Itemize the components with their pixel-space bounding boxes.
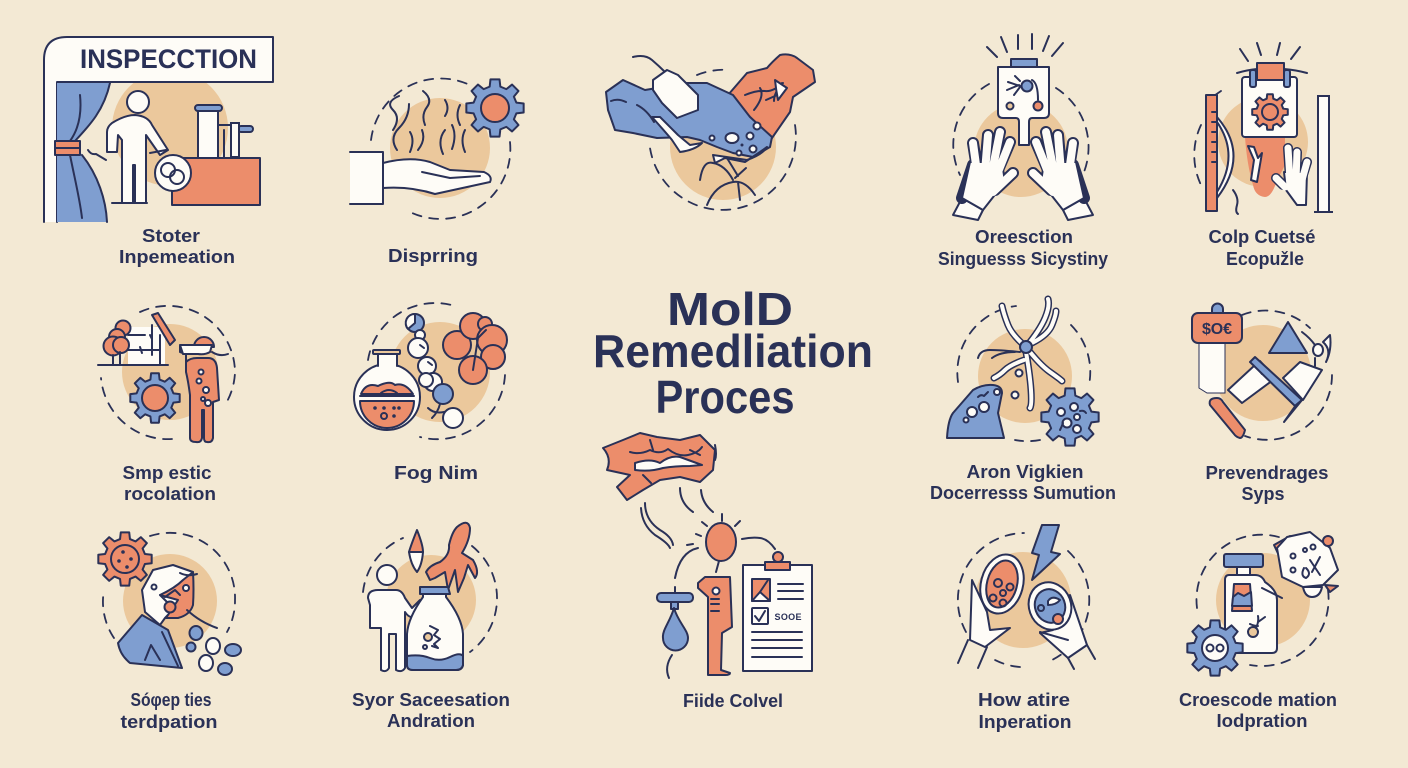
panel: person with jar: [363, 523, 497, 671]
caption: Oreesction: [975, 227, 1073, 247]
caption: Singuesss Sicystiny: [938, 249, 1108, 269]
icon: flask: [354, 350, 420, 430]
title: [593, 283, 873, 423]
icon: orange mold: [728, 54, 815, 138]
panel: mold with spores and tools: [603, 433, 812, 678]
icon: mycelium: [978, 299, 1062, 408]
icon: rays: [987, 34, 1063, 57]
heading label: inspection: INSPECCTION: [80, 44, 257, 74]
icon: spore gear: [98, 532, 152, 586]
title: Remedliation: [593, 325, 873, 377]
icon: clipboard checklist: [743, 552, 812, 671]
icon: coughed particles: [186, 626, 241, 675]
title: Proces: [656, 371, 794, 423]
caption: Fog Nim: [394, 463, 478, 483]
panel: mold blobs: [606, 54, 815, 210]
icon: molecules: [406, 313, 507, 428]
icon: bar: [1314, 96, 1333, 212]
caption: Syor Saceesation: [352, 690, 510, 710]
icon: leaf: [1302, 332, 1330, 366]
icon: open hand: [350, 152, 491, 204]
icon: hammer handle: [1210, 398, 1245, 438]
icon: lightning: [1032, 525, 1060, 580]
icon: spore trails: [641, 488, 713, 548]
caption: Inpemeation: [119, 247, 235, 267]
icon: gear: [1041, 388, 1099, 446]
icon: poster: [998, 59, 1049, 145]
caption: Colp Cuetsé: [1208, 227, 1316, 247]
icon: dropper: [657, 587, 693, 678]
panel: coughing man: [98, 532, 241, 675]
icon: orange stain: [1245, 137, 1285, 197]
caption: terdpation: [120, 712, 218, 732]
icon: price sign: $O€: [1202, 321, 1232, 338]
panel: spray bottle and gear: [1187, 532, 1338, 676]
caption: Docerresss Sumution: [930, 483, 1116, 503]
panel: cost tag and tools: [1192, 304, 1332, 440]
caption: Ecopužle: [1226, 249, 1304, 269]
icon: curtain: [55, 83, 110, 222]
caption: Stoter: [142, 226, 200, 246]
caption: Sóφep ties: [130, 690, 212, 710]
icon: droplet: [409, 530, 423, 572]
icon: orange bulb: [675, 514, 775, 578]
icon: orange mold mass: [603, 433, 716, 500]
icon: left hand: [953, 132, 1013, 220]
caption: How atire: [978, 690, 1070, 710]
icon: clipboard: [1242, 63, 1297, 137]
caption: Fiide Colvel: [683, 691, 783, 711]
caption: Smp estic: [122, 463, 212, 483]
caption: Syps: [1242, 484, 1284, 504]
icon: spore strands: [390, 91, 465, 154]
title: MolD: [667, 283, 793, 335]
icon: gear with eyes: [1187, 620, 1243, 676]
icon: blue mold: [606, 80, 772, 157]
panel: hands with poster: [953, 34, 1093, 220]
icon: worker: [152, 313, 228, 442]
panel: ruler and clipboard: [1194, 43, 1333, 214]
icon: toolbox: [172, 105, 260, 205]
caption: Inperation: [978, 712, 1072, 732]
icon: gear: [130, 373, 180, 423]
icon: magnified mold: [1274, 532, 1338, 597]
icon: blue mold: [947, 385, 1004, 438]
icon: man: [118, 565, 217, 668]
icon: orange tool: [698, 577, 732, 675]
icon: clipboard checklist: SOOE: [774, 612, 802, 622]
icon: person: [368, 565, 423, 671]
panel: inspection: [44, 37, 273, 222]
icon: left specimen: [958, 550, 1030, 668]
caption: Iodpration: [1216, 711, 1308, 731]
icon: squid mold: [426, 523, 477, 592]
icon: jar: [407, 587, 463, 670]
panel: hand with spores: [350, 79, 524, 219]
icon: blue triangle: [1269, 322, 1307, 353]
panel: neural mold and gear: [947, 299, 1099, 446]
heading label: inspection: [44, 37, 273, 222]
caption: Prevendrages: [1206, 463, 1328, 483]
icon: inspector: [88, 91, 168, 203]
panel: petri hands and lightning: [958, 525, 1095, 669]
icon: rays: [1237, 43, 1307, 73]
icon: right hand: [1033, 132, 1093, 220]
icon: trees and wall: [98, 320, 168, 365]
caption: rocolation: [124, 484, 216, 504]
icon: tools: [1228, 357, 1322, 422]
panel: worker with gear: [98, 306, 235, 442]
icon: magnifier: [155, 155, 191, 191]
icon: bottle: [1224, 554, 1282, 653]
caption: Croescode mation: [1179, 690, 1337, 710]
caption: Disprring: [388, 246, 478, 266]
caption: Aron Vigkien: [966, 462, 1084, 482]
panel: flask and molecules: [354, 303, 507, 439]
caption: Andration: [387, 711, 475, 731]
icon: ruler: [1206, 95, 1238, 214]
icon: small tool: [1248, 146, 1262, 182]
icon: right specimen: [1022, 576, 1095, 669]
icon: gear: [466, 79, 524, 137]
icon: hand: [1276, 148, 1307, 205]
icon: white pod: [633, 56, 767, 205]
